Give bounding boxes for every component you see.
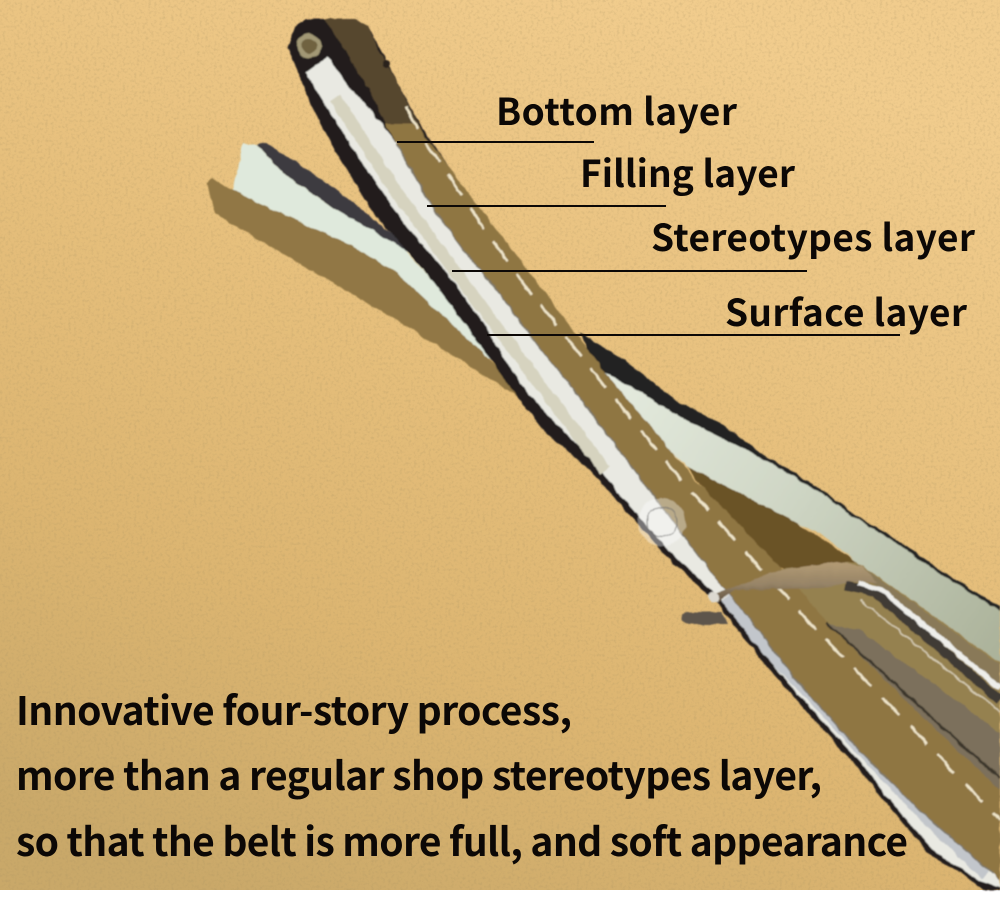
rear strap: dark surface band (257, 143, 412, 255)
photo: opened belt strap held by tweezers (207, 19, 1000, 890)
tweezers: needle line (827, 623, 1000, 778)
grey fuzzy edge between white and brown (397, 143, 993, 873)
layer texture: beige stereotypes band (335, 98, 605, 470)
tweezers: pin left of strap (682, 612, 728, 624)
main strap: dark top fold (325, 19, 418, 124)
small rivet (382, 60, 390, 68)
caption: four-story process description (16, 681, 908, 868)
caption: four-story process description: so that the belt is more full, and soft appearance (16, 812, 908, 868)
buckle hole tube (299, 36, 319, 56)
watermark inner ring (647, 507, 677, 537)
tweezers: upper arm band (858, 564, 1000, 690)
shadow wedge under foam (687, 467, 857, 570)
main strap: black surface edge (288, 19, 1000, 890)
label: filling layer: Filling layer (580, 144, 796, 198)
label: bottom layer: Bottom layer (496, 82, 738, 136)
tweezers: thin line (860, 600, 1000, 712)
tweezers tip (709, 592, 719, 602)
right strap: black edge (580, 333, 1000, 625)
label: stereotypes layer: Stereotypes layer (651, 208, 976, 262)
tweezers: chrome shadow (845, 586, 1000, 700)
label: surface layer: Surface layer (725, 283, 968, 337)
main strap: brown bottom leather (385, 124, 1000, 880)
stitching (407, 107, 1000, 820)
right strap: brown leather beyond tweezers (770, 562, 1000, 830)
rear strap: brown bottom leather (207, 178, 530, 405)
caption: four-story process description: more than a regular shop stereotypes layer, (16, 746, 822, 802)
right strap: foam filling (605, 372, 1000, 663)
rear strap: pale foam filling (233, 143, 500, 368)
main strap: white stereotypes and filling layers (306, 57, 1000, 887)
tweezers: lower arm steel strip (827, 623, 1000, 790)
tweezers: upper arm bend (712, 562, 878, 603)
watermark circle (638, 498, 686, 546)
caption: four-story process description: Innovative four-story process, (16, 681, 572, 737)
silver edge highlight (725, 598, 985, 875)
tweezers: chrome highlight (858, 583, 1000, 688)
